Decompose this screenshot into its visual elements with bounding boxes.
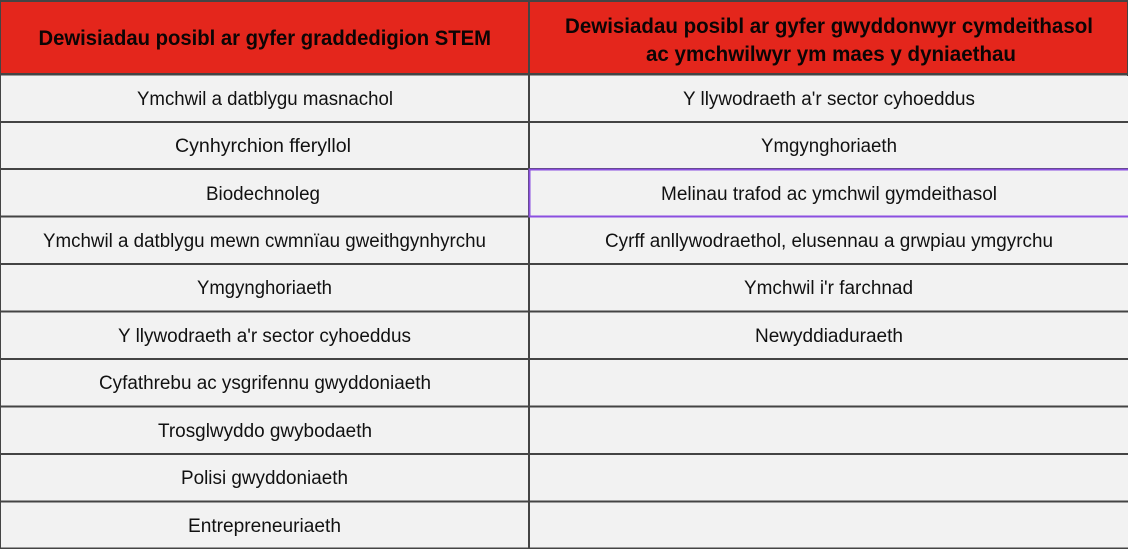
left column: STEM options: Ymchwil a datblygu mewn cwmnïau gweithgynhyrchu [43, 231, 486, 252]
left column: STEM options: Entrepreneuriaeth [188, 516, 341, 537]
right column: social science and humanities options: Ymgynghoriaeth [761, 136, 897, 157]
heading: social scientists and humanities column: Dewisiadau posibl ar gyfer gwyddonwyr cymdeithasol [565, 15, 1093, 38]
heading: STEM graduates column: Dewisiadau posibl ar gyfer graddedigion STEM [38, 27, 491, 50]
right column: social science and humanities options: Cyrff anllywodraethol, elusennau a grwpiau ymgyrchu [605, 231, 1053, 252]
left column: STEM options: Ymchwil a datblygu masnachol [137, 89, 393, 110]
left column: STEM options: Trosglwyddo gwybodaeth [158, 421, 372, 442]
left column: STEM options: Polisi gwyddoniaeth [181, 468, 348, 489]
right column: social science and humanities options: Ymchwil i'r farchnad [744, 278, 913, 299]
header row background [0, 2, 1128, 74]
left column: STEM options: Y llywodraeth a'r sector cyhoeddus [118, 326, 411, 347]
left column: STEM options: Ymgynghoriaeth [197, 278, 332, 299]
right column: social science and humanities options: Newyddiaduraeth [755, 326, 903, 347]
left column: STEM options: Biodechnoleg [206, 184, 320, 205]
right column: social science and humanities options [605, 89, 1053, 347]
left column: STEM options [43, 89, 486, 537]
selected cell outline [530, 170, 1128, 216]
heading: social scientists and humanities column [565, 15, 1093, 66]
left column: STEM options: Cynhyrchion fferyllol [175, 136, 351, 157]
left column: STEM options: Cyfathrebu ac ysgrifennu gwyddoniaeth [99, 373, 431, 394]
right column: social science and humanities options: Y llywodraeth a'r sector cyhoeddus [683, 89, 975, 110]
heading: social scientists and humanities column: ac ymchwilwyr ym maes y dyniaethau [646, 43, 1016, 66]
right column: social science and humanities options: Melinau trafod ac ymchwil gymdeithasol [661, 184, 997, 205]
